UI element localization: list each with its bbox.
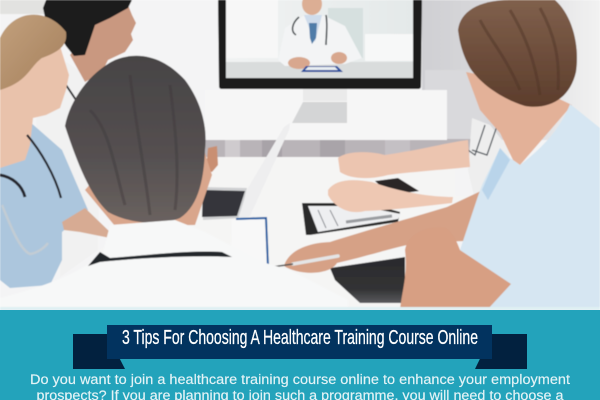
ribbon main band	[107, 325, 492, 359]
laptop	[201, 123, 290, 220]
black folder	[330, 257, 405, 303]
photo: online healthcare training session	[0, 0, 600, 312]
intro paragraph	[30, 372, 570, 400]
tablet	[375, 178, 419, 195]
arm and hand of trainee on table	[338, 140, 470, 178]
right man t-shirt	[460, 104, 600, 310]
ribbon right tail	[475, 334, 527, 369]
monitor stand and shelf	[205, 89, 447, 140]
title ribbon	[73, 325, 527, 369]
ribbon left tail	[73, 334, 125, 369]
content band	[0, 310, 600, 400]
right man neck	[466, 72, 572, 165]
hand holding pen behind gray haired man	[206, 146, 218, 172]
clipboard with paper	[302, 203, 401, 235]
intro paragraph: Do you want to join a healthcare training course online to enhance your employment	[30, 372, 570, 387]
room background	[0, 0, 600, 312]
gray haired man	[65, 56, 212, 226]
blue clipboard	[230, 218, 268, 268]
video doctor	[278, 0, 362, 72]
dark haired woman	[36, 0, 136, 277]
right man hair	[458, 0, 577, 107]
blond nurse	[0, 15, 110, 288]
other trainee white coat, right	[468, 118, 510, 200]
second arm and hand of trainee	[328, 180, 453, 212]
right man second arm	[400, 227, 512, 310]
right man arm with pen	[272, 190, 490, 273]
white table	[72, 157, 470, 310]
gray haired man white coat	[0, 220, 348, 310]
monitor	[218, 0, 422, 89]
